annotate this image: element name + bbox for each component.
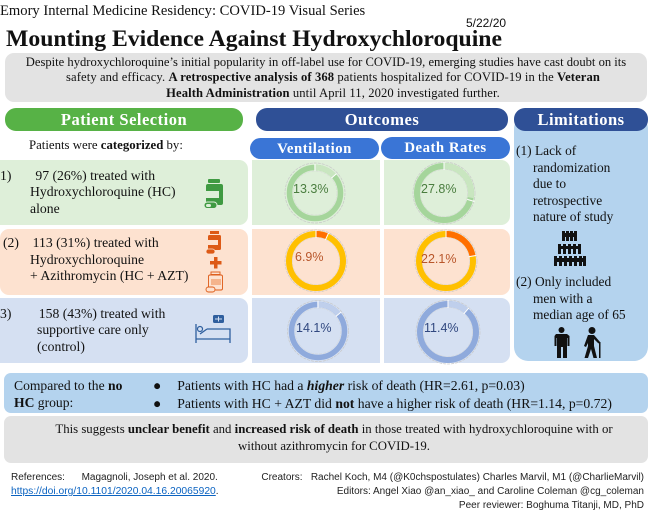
panel: conclusion: This suggests unclear benefit and increased risk of death in those treated with hydroxychloroquine with or: [55, 422, 613, 436]
text: group 3: 3) 158 (43%) treated with: [0, 306, 165, 320]
references: https://doi.org/10.1101/2020.04.16.20065920.: [11, 486, 219, 497]
text: limitation 2: men with a: [533, 290, 592, 306]
references: [11, 472, 219, 497]
text: comparison group: [14, 378, 122, 410]
text: comparison group: HC group:: [14, 394, 73, 410]
panel: introduction: Despite hydroxychloroquine’s initial popularity in off-label use for COVID-19, emerging studies have cast doubt on its: [26, 55, 626, 69]
heading: patient selection: Patient Selection: [61, 110, 187, 129]
references: References: Magagnoli, Joseph et al. 2020.: [11, 472, 218, 483]
text: group 1: 1) 97 (26%) treated with: [0, 168, 155, 182]
chart: ventilation control donut 14.1%: [287, 300, 349, 362]
heading: outcomes: Outcomes: [345, 110, 419, 129]
icon: hospital bed: [195, 315, 231, 343]
text: group 1: Hydroxychloroquine (HC): [30, 184, 176, 199]
text: group 1: alone: [30, 200, 60, 216]
chart: ventilation HC donut 13.3%: [284, 162, 346, 224]
creators and editors: Peer reviewer: Boghuma Titanji, MD, PhD: [459, 500, 644, 511]
icon: green pill bottle: [204, 179, 223, 208]
heading: outcomes: [256, 108, 508, 131]
heading: ventilation: [250, 138, 379, 159]
text: findings: [153, 378, 612, 411]
heading: death rates: Death Rates: [404, 140, 487, 156]
series heading: Emory Internal Medicine Residency: COVID-19 Visual Series: [0, 3, 365, 19]
text: limitation 1: retrospective: [533, 192, 602, 208]
title: Mounting Evidence Against Hydroxychloroquine: [6, 26, 502, 52]
icon: elderly person with cane: [584, 327, 600, 358]
label: 22.1%: 22.1%: [421, 252, 456, 266]
icon: man: [554, 327, 570, 358]
label: 14.1%: 14.1%: [296, 321, 331, 335]
text: group 2: Hydroxychloroquine: [30, 252, 144, 266]
creators and editors: [261, 472, 644, 511]
text: group 3: supportive care only: [37, 322, 149, 337]
chart: ventilation HC+AZT donut 6.9%: [284, 230, 348, 292]
text: limitation 2: median age of 65: [533, 307, 626, 322]
panel: conclusion: without azithromycin for COVID-19.: [238, 438, 430, 452]
text: group 1: [0, 168, 176, 216]
text: comparison group: Compared to the no: [14, 378, 122, 392]
panel: death control cell: [384, 298, 510, 363]
label: 6.9%: 6.9%: [295, 250, 324, 264]
text: categorized intro: Patients were categorized by:: [29, 138, 183, 152]
heading: limitations: Limitations: [537, 110, 625, 129]
text: group 2: [3, 235, 188, 283]
creators and editors: Creators: Rachel Koch, M4 (@K0chspostulates) Charles Marvil, M1 (@CharlieMarvil): [261, 472, 644, 483]
label: 11.4%: 11.4%: [424, 321, 459, 335]
date: 5/22/20: [466, 16, 506, 30]
text: group 3: [0, 306, 166, 354]
text: group 2: (2) 113 (31%) treated with: [3, 235, 159, 250]
panel: death HC+AZT cell: [384, 229, 510, 295]
text: limitation 1: nature of study: [533, 209, 613, 224]
text: limitation 2: (2) Only included: [516, 274, 611, 289]
icon: pill bottles with plus: [206, 231, 223, 292]
panel: introduction: [5, 53, 647, 102]
text: limitation 1: (1) Lack of: [516, 143, 576, 158]
panel: conclusion: [4, 416, 648, 463]
heading: limitations: [514, 108, 648, 131]
panel: ventilation HC+AZT cell: [252, 229, 380, 295]
label: 27.8%: 27.8%: [421, 182, 456, 196]
chart: death HC+AZT donut 22.1%: [414, 230, 478, 292]
text: limitation 1: [516, 143, 614, 224]
panel: HC plus AZT row: [0, 229, 248, 295]
text: findings: ● Patients with HC + AZT did not have a higher risk of death (HR=1.14, p=0.72): [153, 396, 612, 410]
label: 13.3%: 13.3%: [293, 182, 328, 196]
panel: introduction: Health Administration until April 11, 2020 investigated further.: [166, 86, 500, 100]
text: limitation 1: randomization: [533, 160, 610, 174]
heading: ventilation: Ventilation: [277, 141, 352, 157]
panel: ventilation HC cell: [252, 160, 380, 225]
text: group 2: + Azithromycin (HC + AZT): [30, 268, 188, 283]
panel: death HC cell: [384, 160, 510, 225]
text: group 3: (control): [37, 338, 85, 354]
icon: crowd of people: [554, 231, 586, 266]
panel: control row: [0, 298, 248, 363]
heading: patient selection: [5, 108, 243, 131]
text: limitation 2: [516, 274, 626, 322]
panel: limitations: [514, 115, 648, 361]
chart: death control donut 11.4%: [416, 300, 480, 364]
panel: HC alone row: [0, 160, 248, 225]
text: limitation 1: due to: [533, 176, 566, 191]
panel: introduction: safety and efficacy. A retrospective analysis of 368 patients hospitalized for COVID-19 in the Veteran: [66, 70, 600, 84]
text: findings: ● Patients with HC had a higher risk of death (HR=2.61, p=0.03): [153, 378, 525, 393]
panel: ventilation control cell: [252, 298, 380, 363]
panel: compared to no HC: [4, 373, 648, 413]
creators and editors: Editors: Angel Xiao @an_xiao_ and Caroline Coleman @cg_coleman: [337, 486, 644, 497]
heading: death rates: [381, 137, 510, 159]
chart: death HC donut 27.8%: [412, 162, 476, 224]
